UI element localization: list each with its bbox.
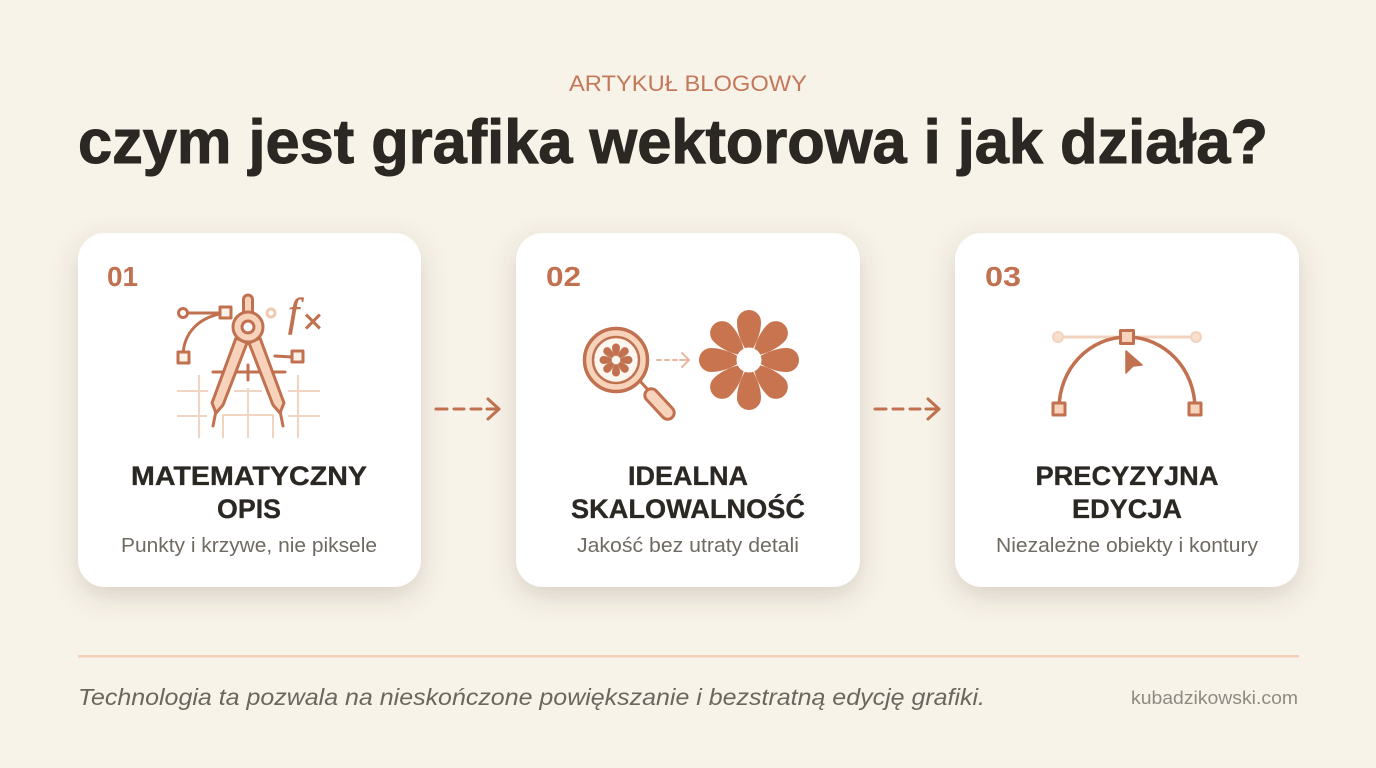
arrow: card 2 to card 3 (875, 399, 939, 419)
icon: bezier curve with cursor (1053, 330, 1201, 415)
card 2 heading (571, 461, 805, 524)
panel: card 1 (78, 233, 421, 587)
card 2 description: Jakość bez utraty detali (577, 535, 799, 557)
eyebrow label: ARTYKUŁ BLOGOWY (569, 71, 807, 96)
card 2 heading: SKALOWALNOŚĆ (571, 493, 805, 524)
step number 02: 02 (546, 261, 581, 292)
icon: compass with bezier curves and grid: f (288, 290, 304, 335)
icon: compass with bezier curves and grid (177, 290, 323, 438)
footer statement: Technologia ta pozwala na nieskończone powiększanie i bezstratną edycję grafiki. (78, 684, 985, 710)
icon: magnifier enlarging flower (584, 310, 799, 422)
card 1 heading: MATEMATYCZNY (131, 461, 367, 491)
card 3 heading (1036, 461, 1218, 524)
card 3 heading: EDYCJA (1072, 494, 1182, 524)
website credit: kubadzikowski.com (1131, 688, 1298, 708)
step number 01: 01 (107, 261, 138, 292)
card 1 description: Punkty i krzywe, nie piksele (121, 535, 377, 557)
card 3 description: Niezależne obiekty i kontury (996, 535, 1258, 557)
panel: card 2 (516, 233, 860, 587)
panel: card 3 (955, 233, 1299, 587)
title: czym jest grafika wektorowa i jak działa? (78, 108, 1268, 177)
card 1 heading (131, 461, 367, 524)
card 1 heading: OPIS (217, 494, 281, 524)
step number 03: 03 (985, 261, 1021, 292)
arrow: card 1 to card 2 (436, 399, 499, 419)
card 2 heading: IDEALNA (628, 461, 748, 491)
card 3 heading: PRECYZYJNA (1036, 461, 1218, 491)
icon: compass with bezier curves and grid: × (303, 303, 323, 341)
